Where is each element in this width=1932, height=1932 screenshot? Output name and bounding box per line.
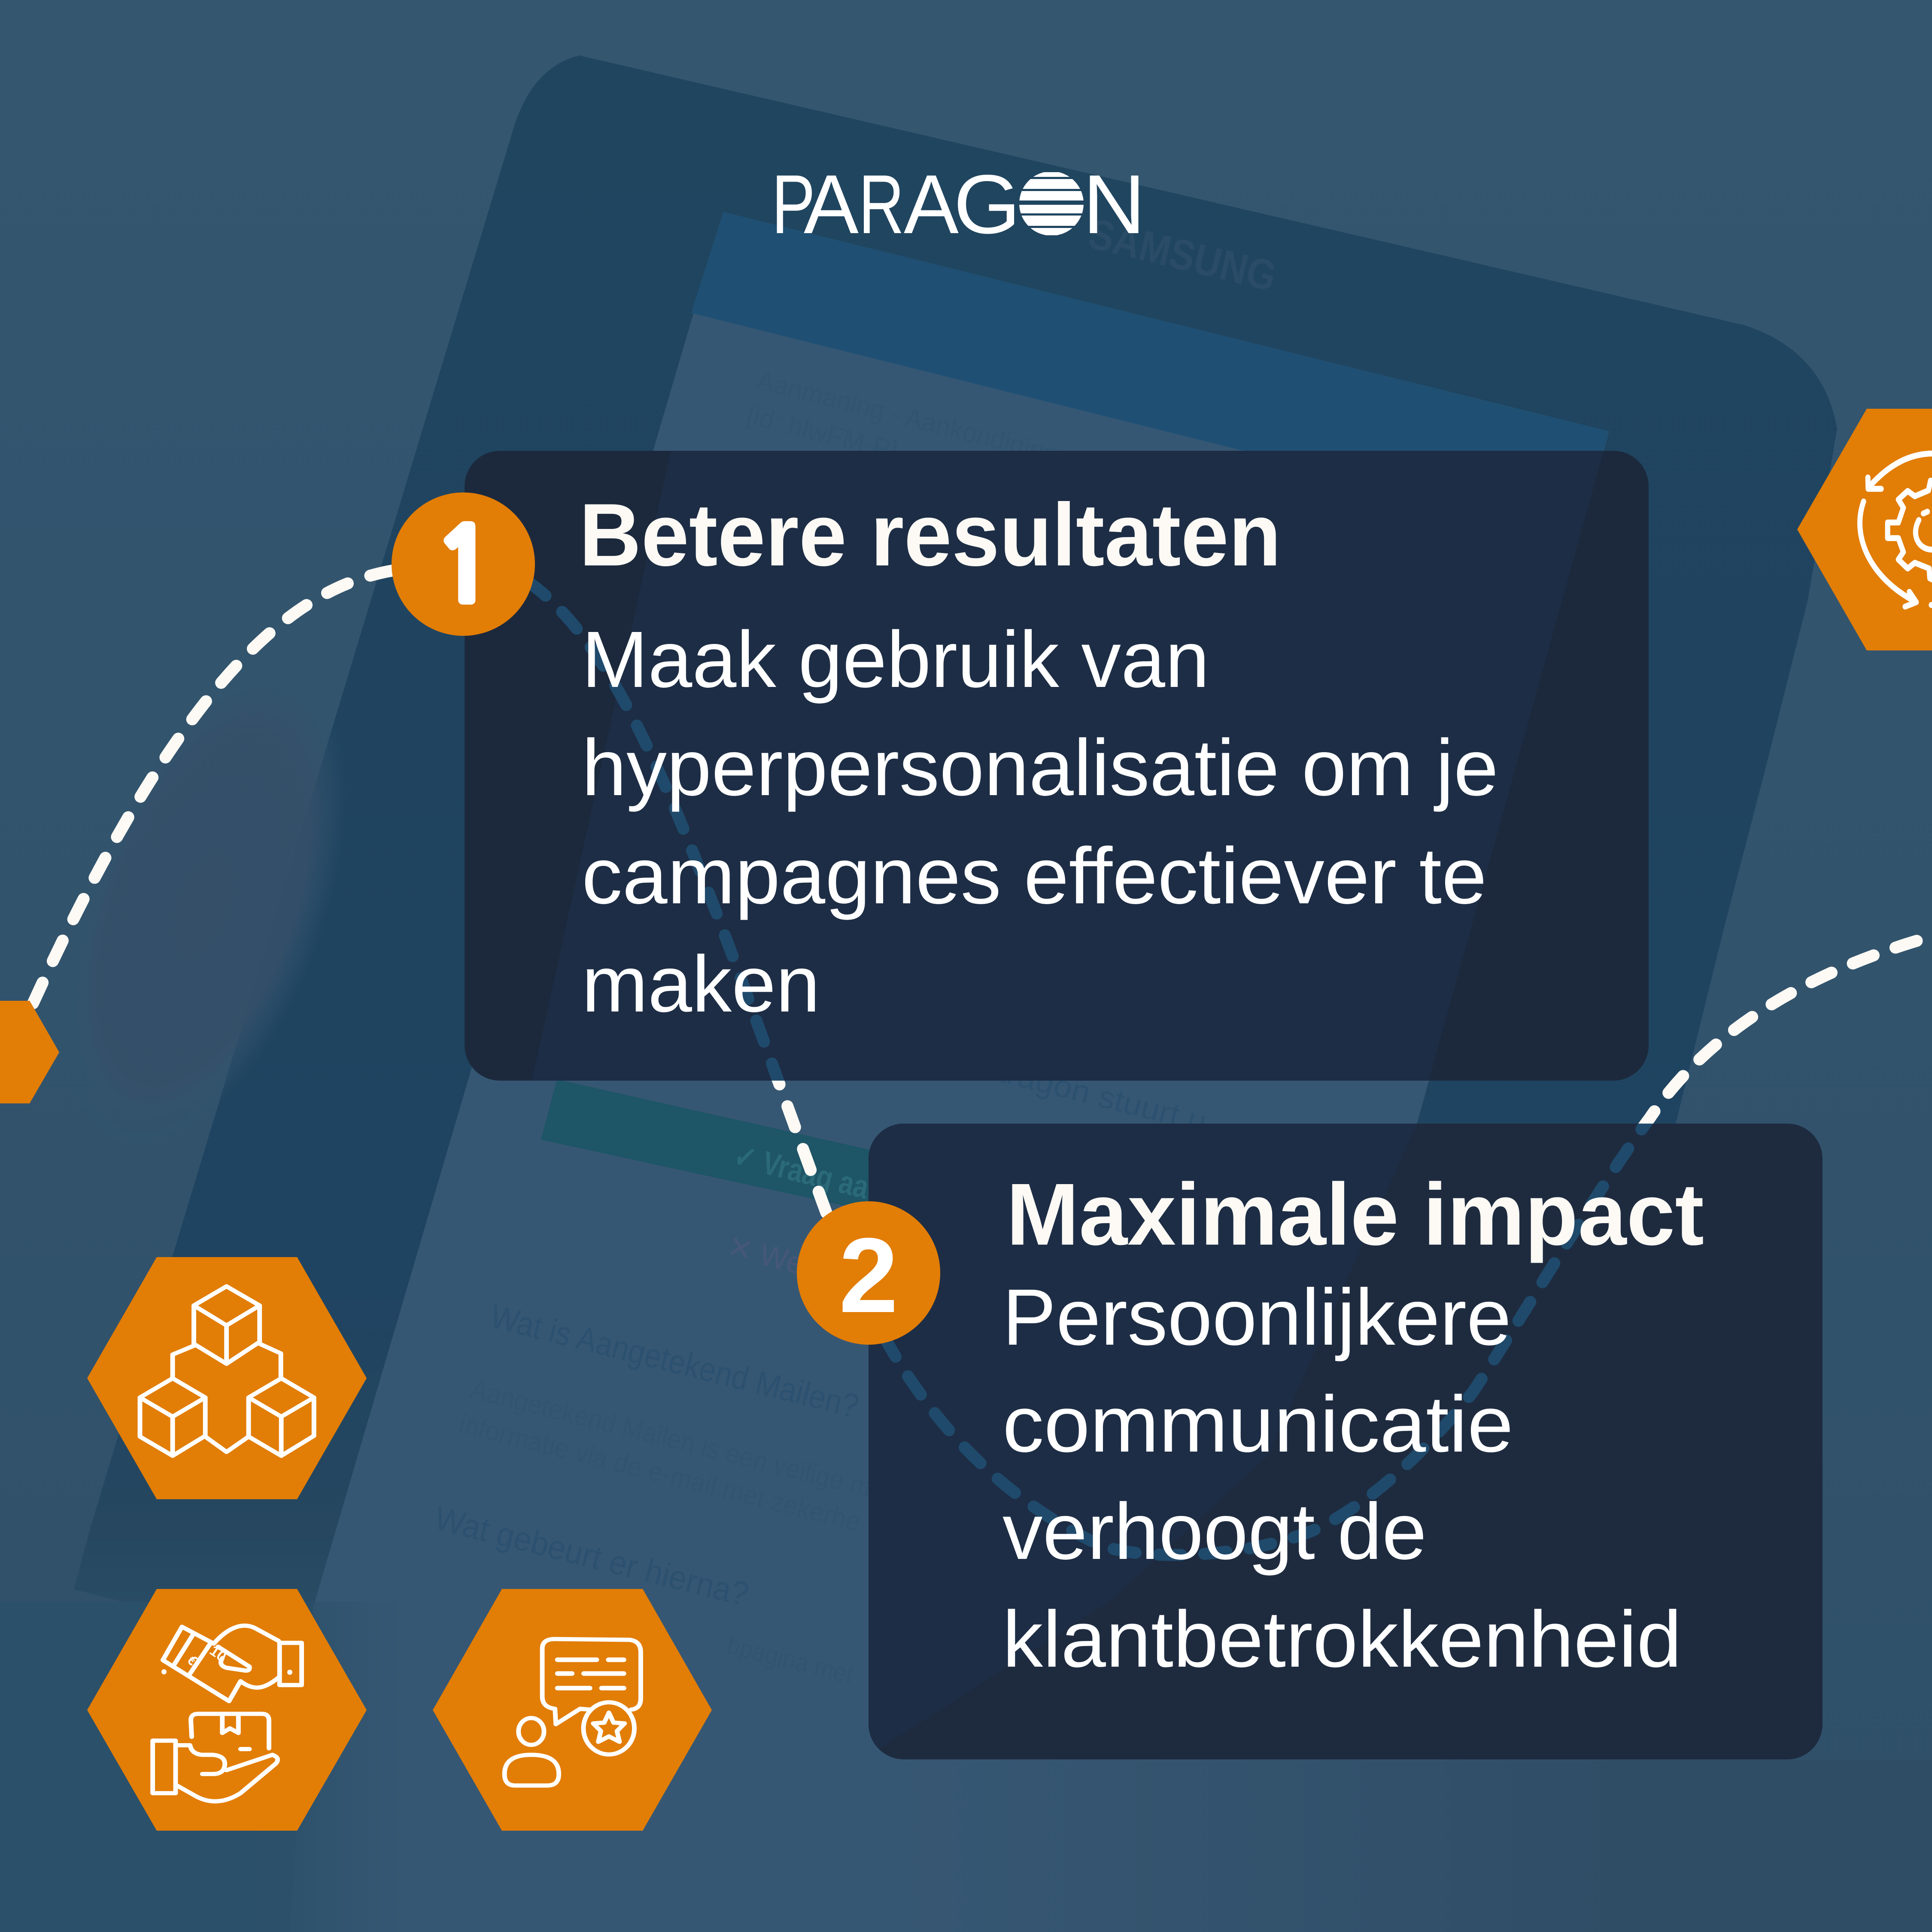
- icon: gear with cycle arrows: [1860, 453, 1932, 607]
- body text: communicatie: [1002, 1380, 1513, 1469]
- body text: campagnes effectiever te: [582, 832, 1487, 920]
- faint screen text: Aangetekend Mailen is een veilige m: [468, 1373, 875, 1503]
- faint screen text: bpagina met: [724, 1630, 856, 1690]
- logo: Paragon: R: [859, 158, 904, 251]
- faint screen text: ✕ We: [724, 1229, 807, 1281]
- logo: Paragon: A: [904, 158, 959, 251]
- faint screen text: Paragon stuurt u: [964, 1047, 1210, 1139]
- faint screen text: Wat is Aangetekend Mailen?: [487, 1297, 863, 1425]
- icon: person with speech bubble and star: [504, 1639, 641, 1786]
- hexagon: left edge: [0, 1001, 59, 1103]
- hexagon: right edge with gear icon: [1797, 409, 1932, 650]
- step badge 2: 2: [839, 1215, 898, 1335]
- panel tint over tablet screen: [532, 451, 1604, 1749]
- body text: [582, 615, 1498, 1029]
- panel 2 text: Maximale impact: [1002, 1165, 1704, 1684]
- step badge 1: [392, 492, 535, 636]
- panel 1 background: [465, 451, 1649, 1081]
- body text: maken: [582, 940, 820, 1029]
- step badge 2: [797, 1201, 940, 1345]
- logo: Paragon: N: [1083, 158, 1145, 251]
- icon: money for package hands: [153, 1626, 302, 1801]
- logo: Paragon: [777, 172, 1139, 235]
- hexagon: cubes icon: [87, 1257, 367, 1499]
- body text: Maak gebruik van: [582, 615, 1209, 704]
- logo: Paragon: A: [804, 158, 859, 251]
- faint screen text: Aanmaning - Aankondiging: [754, 366, 1061, 469]
- body text: hyperpersonalisatie om je: [582, 723, 1498, 812]
- panel 2 background: [869, 1124, 1823, 1759]
- hexagon: exchange icon: [87, 1589, 367, 1831]
- connector: white dashed curve from circle 2 to right edge: [884, 930, 1932, 1555]
- connector: white dashed curve to circle 1: [28, 571, 392, 1015]
- connector: white dashed curve between circle 1 and 2: [528, 582, 841, 1254]
- body text: Persoonlijkere: [1002, 1273, 1511, 1362]
- logo: Paragon: G: [954, 158, 1021, 251]
- heading: Maximale impact: [1006, 1165, 1704, 1264]
- faint screen text: ✓ Vraag aa: [730, 1137, 873, 1206]
- icon: three connected cubes: [140, 1286, 314, 1456]
- faint screen text: [id: hlwFM-P]: [744, 400, 901, 466]
- connector parts seen through panels: [530, 578, 1653, 1561]
- panel 1 text: Betere resultaten: [579, 485, 1498, 1029]
- heading: Betere resultaten: [579, 485, 1281, 584]
- icon label: banknote value: €: [184, 1653, 202, 1668]
- faint screen text: informatie via de e-mail met zekerhe: [456, 1408, 864, 1537]
- hexagon: review icon: [433, 1589, 712, 1831]
- body text: verhoogt de: [1002, 1487, 1427, 1576]
- icon label: banknote value: 10: [207, 1642, 229, 1665]
- body text: klantbetrokkenheid: [1002, 1595, 1682, 1684]
- faint screen text: SAMSUNG: [1084, 209, 1281, 301]
- body text: [1002, 1273, 1682, 1684]
- faint screen text: Wat gebeurt er hierna?: [431, 1499, 753, 1613]
- faint screen text: [431, 209, 1281, 1690]
- step badge 1: 1: [434, 516, 495, 617]
- logo: Paragon: P: [772, 158, 815, 251]
- icon label: banknote value: [184, 1642, 229, 1668]
